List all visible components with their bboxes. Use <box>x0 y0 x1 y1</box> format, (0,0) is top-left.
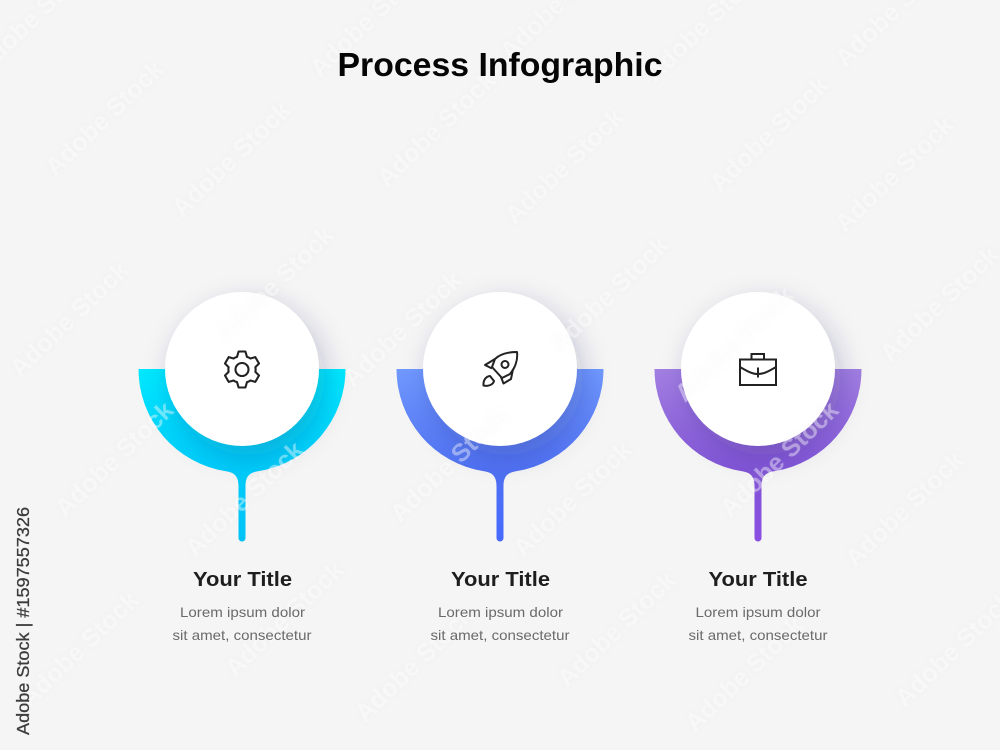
description: Lorem ipsum dolor <box>438 604 563 620</box>
heading: Your Title <box>193 568 292 591</box>
description <box>430 604 570 643</box>
heading: Your Title <box>451 568 550 591</box>
icon: briefcase <box>740 354 776 385</box>
repeating stock watermark: Adobe Stock <box>840 446 969 572</box>
repeating stock watermark: Adobe Stock <box>210 221 339 347</box>
step 2 text <box>430 568 570 643</box>
repeating stock watermark: Adobe Stock <box>220 556 349 682</box>
step 1 text <box>172 568 312 643</box>
repeating stock watermark: Adobe Stock <box>385 401 514 527</box>
white circle <box>165 292 319 446</box>
repeating stock watermark: Adobe Stock <box>5 256 134 382</box>
repeating stock watermark: Adobe Stock <box>40 55 169 181</box>
icon: gear <box>225 352 259 388</box>
description: Lorem ipsum dolor <box>180 604 305 620</box>
repeating stock watermark: Adobe Stock <box>167 96 296 222</box>
description: sit amet, consectetur <box>430 627 570 643</box>
step 1 graphic: gear <box>138 292 346 542</box>
heading: Your Title <box>708 568 808 591</box>
description: Lorem ipsum dolor <box>696 604 821 620</box>
side stock label: Adobe Stock | #1597557326 <box>13 507 33 735</box>
repeating stock watermark: Adobe Stock <box>715 396 844 522</box>
title: Process Infographic <box>338 46 662 83</box>
repeating stock watermark: Adobe Stock <box>15 586 144 712</box>
step 3 text <box>688 568 828 643</box>
step 3 graphic: briefcase <box>654 292 862 542</box>
repeating stock watermark: Adobe Stock <box>180 436 309 562</box>
white circle <box>423 292 577 446</box>
repeating stock watermark: Adobe Stock <box>670 281 799 407</box>
step 2 graphic: rocket <box>396 292 604 542</box>
repeating stock watermark: Adobe Stock <box>372 66 501 192</box>
repeating stock watermark: Adobe Stock <box>552 566 681 692</box>
purple half ring with stem <box>654 369 862 542</box>
white circle <box>681 292 835 446</box>
cyan half ring with stem <box>138 369 346 542</box>
repeating stock watermark: Adobe Stock <box>680 611 809 737</box>
icon: rocket <box>483 352 517 386</box>
description: sit amet, consectetur <box>172 627 312 643</box>
repeating stock watermark: Adobe Stock <box>545 231 674 357</box>
repeating stock watermark: Adobe Stock <box>705 71 834 197</box>
repeating stock watermark: Adobe Stock <box>830 111 959 237</box>
repeating stock watermark: Adobe Stock <box>508 436 637 562</box>
description <box>688 604 828 643</box>
description <box>172 604 312 643</box>
repeating stock watermark: Adobe Stock <box>338 266 467 392</box>
repeating stock watermark: Adobe Stock <box>350 601 479 727</box>
blue half ring with stem <box>396 369 604 542</box>
repeating stock watermark: Adobe Stock <box>500 103 629 229</box>
repeating stock watermark: Adobe Stock <box>50 396 179 522</box>
description: sit amet, consectetur <box>688 627 828 643</box>
